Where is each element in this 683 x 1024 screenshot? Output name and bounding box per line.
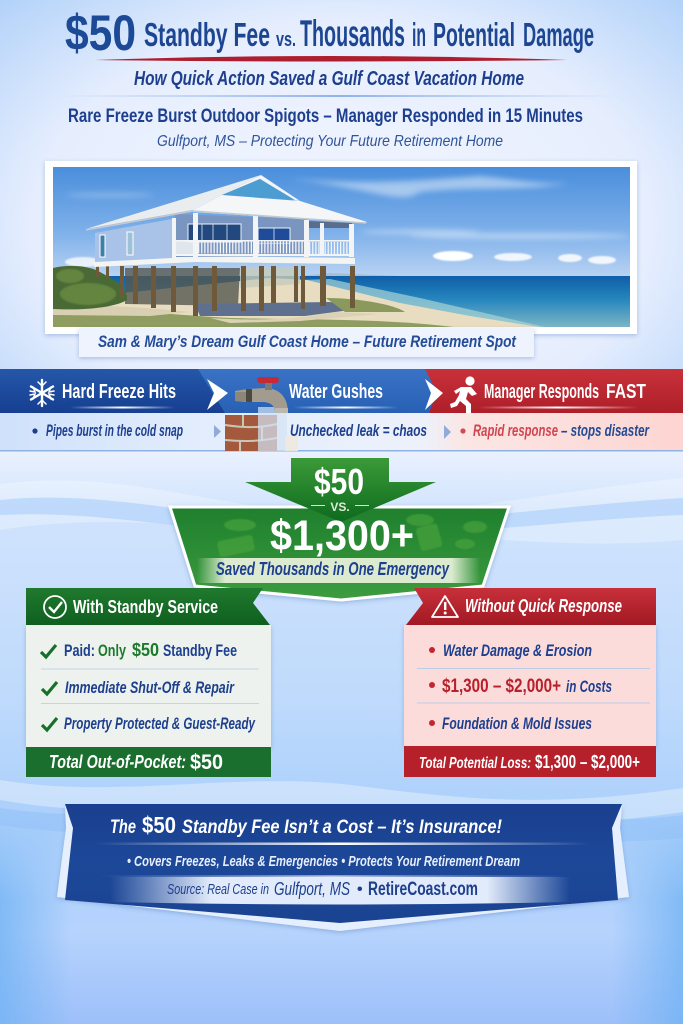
banner heading: The <box>110 817 136 838</box>
row: shut-off: Immediate Shut-Off & Repair <box>65 678 235 697</box>
step 2: water gushes <box>289 381 398 408</box>
row: paid: $50 <box>132 640 159 660</box>
row: protected: Property Protected & Guest-Ready <box>64 714 256 733</box>
banner pale outline <box>57 806 629 931</box>
step 3: manager responds <box>450 376 646 413</box>
panel: with standby service <box>26 588 271 777</box>
title: Potential <box>433 16 515 53</box>
blue divider <box>55 95 621 97</box>
icon: warning triangle <box>432 596 458 617</box>
row: paid: Paid: <box>64 641 95 660</box>
row: foundation: Foundation & Mold Issues <box>442 714 592 733</box>
savings strip: Saved Thousands in One Emergency <box>216 559 450 579</box>
step 2 note: Unchecked leak = chaos <box>290 421 427 440</box>
total bar: Total Out-of-Pocket: <box>49 752 186 772</box>
arrow: step 1 to 2 <box>207 379 228 410</box>
row: foundation <box>429 714 592 733</box>
under-house shadow and posts <box>125 268 240 306</box>
vs. label: VS. <box>330 500 350 514</box>
arrow: step 2 to 3 <box>425 379 443 410</box>
banner bullet points: • Covers Freezes, Leaks & Emergencies • Protects Your Retirement Dream <box>127 853 520 870</box>
row: water damage <box>429 641 592 660</box>
icon: running figure <box>450 376 477 413</box>
red swoosh under title <box>95 56 567 62</box>
banner heading: $50 <box>142 812 176 838</box>
source strip: • <box>357 881 363 898</box>
source strip: Gulfport, MS <box>274 879 350 899</box>
small arrow <box>444 425 451 439</box>
row: costs: $1,300 – $2,000+ <box>442 676 561 697</box>
vs. label <box>311 500 369 514</box>
title: vs. <box>276 29 296 51</box>
process band <box>0 369 683 452</box>
panel: without quick response <box>404 588 656 777</box>
step 1 note <box>32 421 183 440</box>
banner heading <box>110 812 502 838</box>
amount: $1,300+: $1,300+ <box>270 512 414 560</box>
title: $50 <box>65 5 136 61</box>
total bar: $50 <box>190 751 223 774</box>
row: shut-off <box>42 678 235 697</box>
step 3 note: Rapid response <box>473 421 558 440</box>
row: paid: Standby Fee <box>163 641 237 660</box>
step 3 note <box>460 421 650 440</box>
small arrow <box>214 425 221 438</box>
title <box>65 5 594 61</box>
title: Thousands <box>300 13 405 54</box>
row: water damage: Water Damage & Erosion <box>443 641 592 660</box>
total bar: $1,300 – $2,000+ <box>535 752 640 772</box>
header text: Without Quick Response <box>465 596 622 616</box>
location line: Gulfport, MS – Protecting Your Future Retirement Home <box>157 133 503 150</box>
row: costs: in Costs <box>566 677 612 696</box>
arrow shape <box>245 458 436 522</box>
total bar <box>404 746 656 777</box>
amount: $50: $50 <box>314 461 364 502</box>
step 1 note: Pipes burst in the cold snap <box>46 421 183 440</box>
banner body <box>65 804 622 923</box>
title: Standby Fee <box>144 16 270 53</box>
row: paid: Only <box>98 641 126 660</box>
title: in <box>412 16 426 53</box>
green ribbon header <box>26 588 270 625</box>
photo caption <box>79 328 534 357</box>
photo caption: Sam & Mary’s Dream Gulf Coast Home – Future Retirement Spot <box>98 332 517 351</box>
step 3: manager responds: Manager Responds <box>484 381 599 403</box>
insurance banner <box>57 804 629 931</box>
step 2: water gushes: Water Gushes <box>289 381 383 403</box>
banner heading: Standby Fee Isn’t a Cost – It’s Insurance! <box>182 817 502 838</box>
savings strip <box>197 558 480 583</box>
icon: check circle <box>44 596 66 618</box>
total bar: Total Potential Loss: <box>419 755 531 772</box>
red ribbon header <box>406 588 656 625</box>
total bar <box>26 747 271 777</box>
source strip: Source: Real Case in <box>167 881 269 898</box>
source strip <box>110 877 570 904</box>
row: paid <box>41 640 237 660</box>
header text: With Standby Service <box>73 597 218 617</box>
row: protected <box>42 714 256 733</box>
subtitle: How Quick Action Saved a Gulf Coast Vacation Home <box>134 68 524 90</box>
savings badge <box>170 458 509 600</box>
step 1: hard freeze: Hard Freeze Hits <box>62 381 176 403</box>
icon: snowflake <box>30 380 54 406</box>
step 1: hard freeze <box>30 380 176 408</box>
photo panel: stilt beach house <box>45 161 637 334</box>
step 3: manager responds: FAST <box>606 381 646 403</box>
icon: leaking faucet on brick <box>225 377 298 451</box>
title: Damage <box>523 16 594 53</box>
source strip: RetireCoast.com <box>368 879 478 900</box>
